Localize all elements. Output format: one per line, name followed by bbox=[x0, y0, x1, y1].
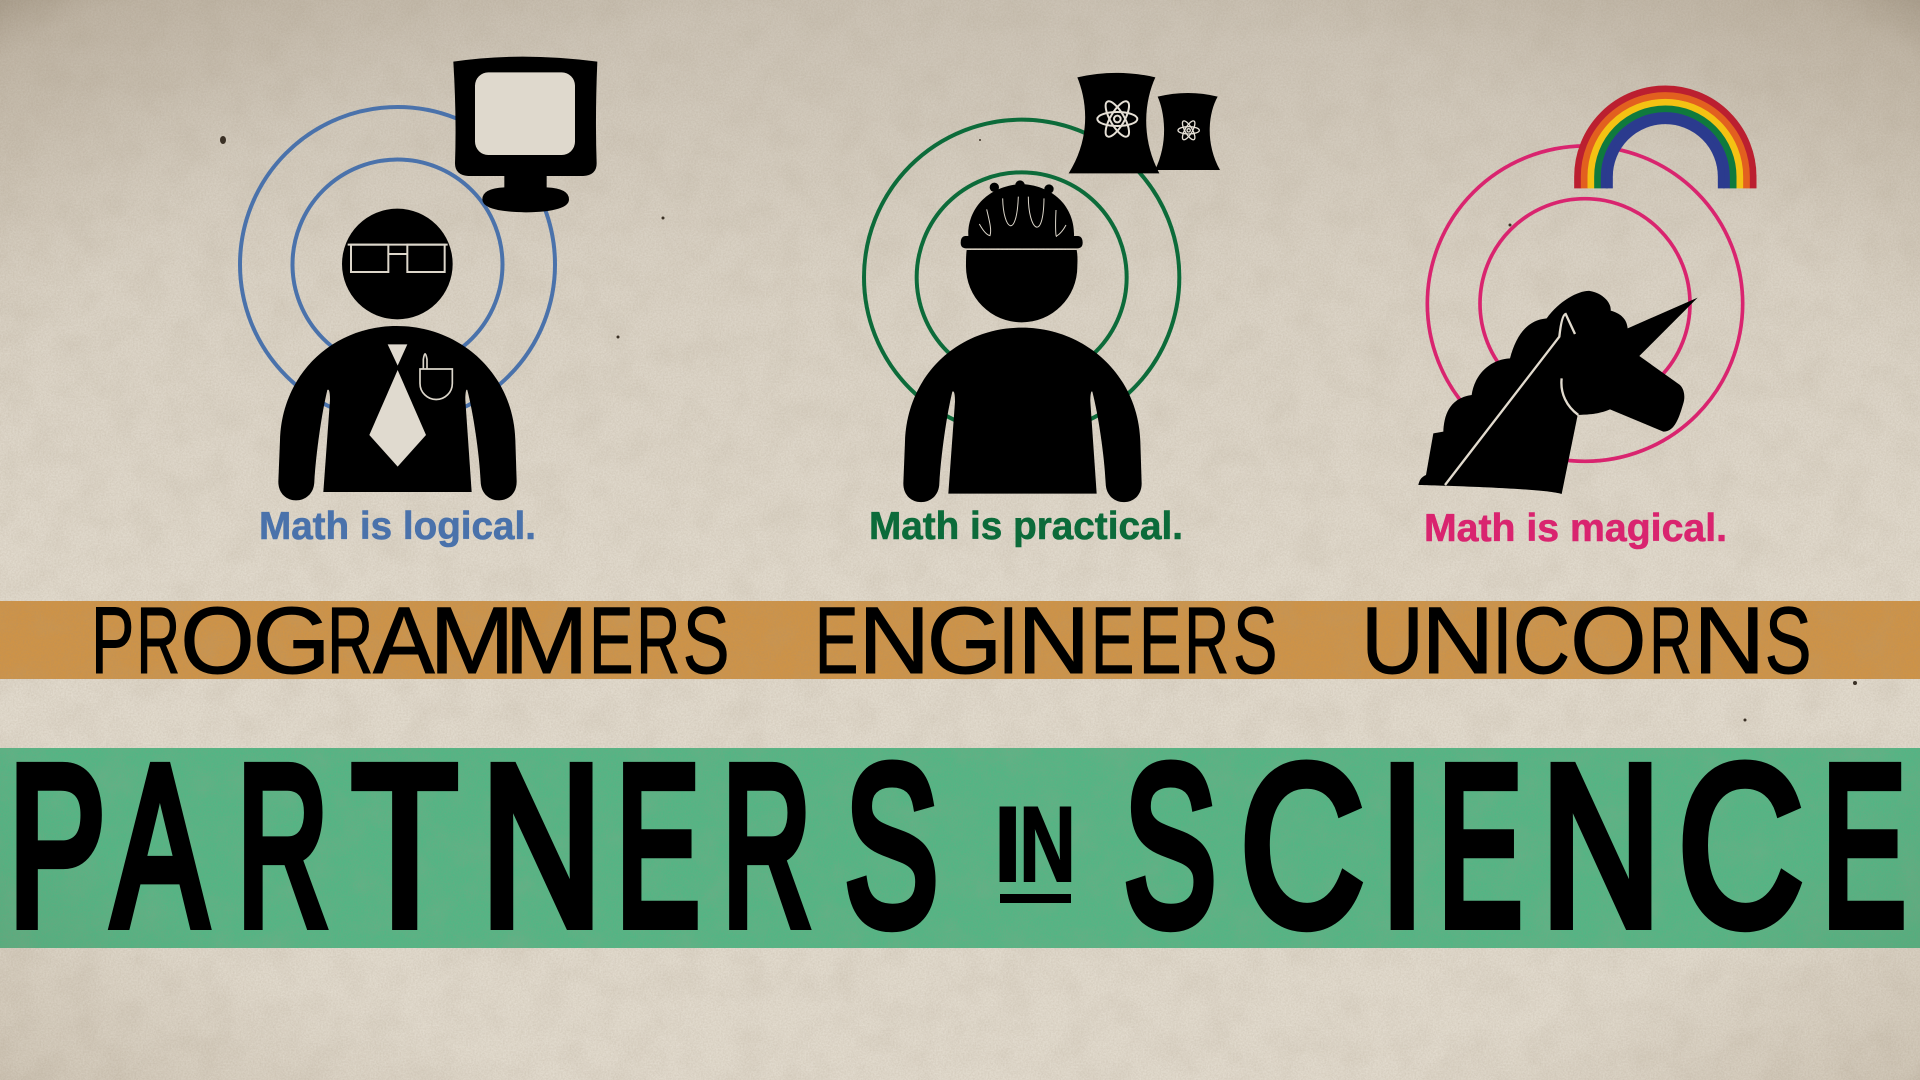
label: programmers: E bbox=[589, 588, 634, 694]
label: engineers: E bbox=[1139, 588, 1182, 694]
label: engineers: S bbox=[1233, 588, 1278, 694]
tie bbox=[369, 344, 426, 467]
caption: math is practical: Math is practical. bbox=[869, 505, 1183, 548]
title word: partners: T bbox=[352, 720, 458, 973]
title word: science: N bbox=[1541, 720, 1660, 973]
body with suit bbox=[278, 326, 517, 500]
label: unicorns: U bbox=[1361, 588, 1424, 694]
label: programmers: G bbox=[253, 588, 331, 694]
label: programmers: R bbox=[636, 588, 680, 694]
caption: math is logical: Math is logical. bbox=[259, 505, 536, 548]
body bbox=[903, 328, 1142, 502]
caption: math is magical: Math is magical. bbox=[1424, 507, 1727, 550]
label: engineers: G bbox=[927, 588, 1002, 694]
green band fill bbox=[0, 748, 1920, 948]
title word: in bbox=[994, 784, 1076, 904]
label: unicorns: S bbox=[1765, 588, 1812, 694]
icon: programmer figure bbox=[278, 209, 517, 500]
label: programmers: S bbox=[683, 588, 730, 694]
title word: partners: A bbox=[113, 720, 207, 973]
label: engineers: I bbox=[998, 588, 1019, 694]
title word: science: E bbox=[1438, 720, 1522, 973]
label: programmers: P bbox=[91, 588, 134, 694]
title lettering bbox=[8, 720, 1906, 973]
label: unicorns: N bbox=[1693, 588, 1765, 694]
programmer concentric rings bbox=[240, 107, 555, 422]
label: unicorns: R bbox=[1649, 588, 1692, 694]
icon: unicorn head bbox=[1418, 291, 1698, 494]
title word: partners: S bbox=[845, 720, 938, 973]
unicorn concentric rings bbox=[1427, 146, 1743, 461]
label: programmers: M bbox=[504, 588, 588, 694]
panel: unicorns bbox=[1418, 89, 1753, 550]
label: programmers: R bbox=[136, 588, 180, 694]
title word: partners: P bbox=[8, 720, 106, 973]
label: programmers: M bbox=[429, 588, 515, 694]
engineer concentric rings bbox=[864, 120, 1179, 435]
label: unicorns: I bbox=[1492, 588, 1513, 694]
icon: engineer figure bbox=[903, 180, 1142, 502]
label: programmers: A bbox=[373, 588, 435, 694]
title word: in: N bbox=[1019, 784, 1076, 904]
icon: rainbow bbox=[1578, 89, 1753, 188]
head bbox=[966, 250, 1077, 322]
panel: engineers bbox=[864, 73, 1220, 548]
panel: programmers bbox=[240, 57, 597, 548]
label: unicorns: O bbox=[1570, 588, 1647, 694]
label: unicorns: N bbox=[1421, 588, 1494, 694]
label: engineers: R bbox=[1184, 588, 1229, 694]
title word: partners: N bbox=[481, 720, 602, 973]
title word: partners: R bbox=[722, 720, 811, 973]
hard hat bbox=[961, 180, 1083, 248]
label: programmers: R bbox=[327, 588, 373, 694]
label: unicorns: C bbox=[1513, 588, 1570, 694]
label: engineers: N bbox=[1017, 588, 1090, 694]
shirt pocket with pen bbox=[420, 354, 452, 399]
title word: science: I bbox=[1380, 720, 1424, 973]
title word: partners: R bbox=[237, 720, 328, 973]
label: engineers: E bbox=[1091, 588, 1134, 694]
label: engineers: E bbox=[815, 588, 858, 694]
title word: science: S bbox=[1124, 720, 1216, 973]
title word: science: C bbox=[1240, 720, 1364, 973]
icon: computer monitor bbox=[453, 57, 597, 212]
label: engineers: N bbox=[858, 588, 930, 694]
title word: partners: E bbox=[616, 720, 700, 973]
title word: in: I bbox=[994, 784, 1022, 904]
icon: nuclear cooling towers bbox=[1069, 73, 1220, 173]
glasses bbox=[348, 245, 448, 272]
orange band fill bbox=[0, 601, 1920, 679]
title word: science: C bbox=[1678, 720, 1803, 973]
label: programmers: O bbox=[180, 588, 255, 694]
band labels: group names bbox=[91, 588, 1812, 694]
